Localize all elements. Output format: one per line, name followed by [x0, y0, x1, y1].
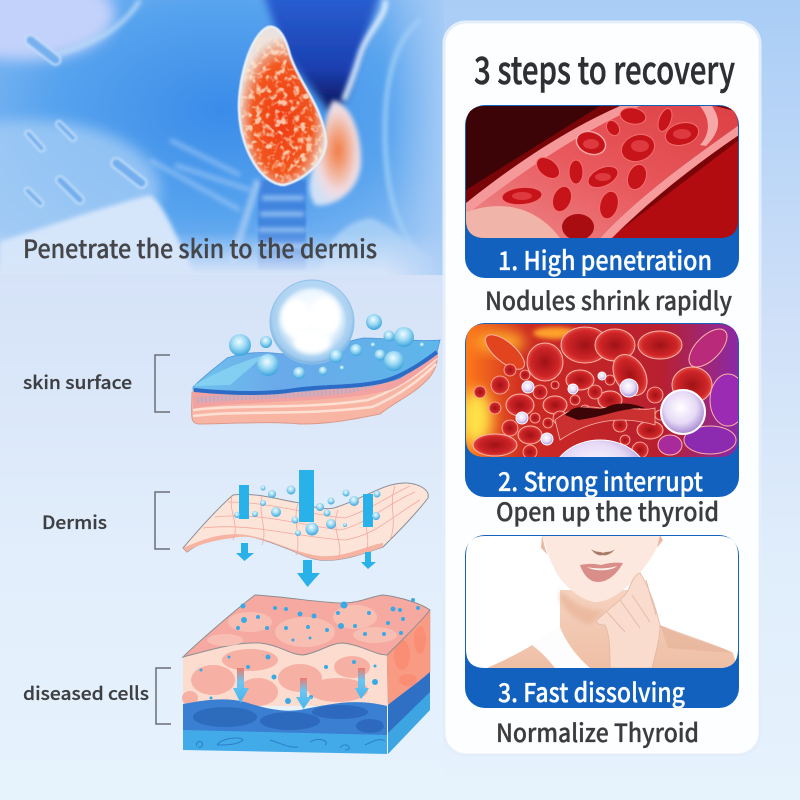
label: skin surface: skin surface	[23, 369, 132, 395]
step 3 caption: Normalize Thyroid	[496, 714, 699, 750]
block water droplets	[200, 598, 420, 704]
label: dermis: Dermis	[42, 509, 107, 535]
label: skin surface	[23, 355, 170, 412]
step 1 image: blood vessel	[465, 105, 739, 240]
big bubble	[270, 280, 354, 364]
step 2 caption: Open up the thyroid	[496, 493, 719, 529]
hand	[597, 573, 660, 668]
thyroid texture	[241, 29, 324, 183]
step 2 card	[465, 323, 739, 497]
thyroid back lobe	[309, 100, 361, 205]
lips	[580, 563, 623, 582]
arrows into dermis	[236, 470, 376, 587]
step 1 card	[465, 105, 739, 278]
heading: penetrate the skin: Penetrate the skin to the dermis	[23, 230, 377, 266]
step 1 caption: Nodules shrink rapidly	[485, 282, 732, 318]
step 3 image: woman touching neck	[465, 535, 739, 669]
step 2 image: blood cells	[466, 324, 738, 457]
label: diseased cells: diseased cells	[23, 680, 149, 706]
illustration: skin surface layers with bubbles	[192, 280, 440, 424]
label: diseased cells	[23, 668, 171, 724]
small bubbles	[229, 314, 424, 379]
step 2 label: 2. Strong interrupt	[498, 462, 703, 499]
panel: 3 steps to recovery	[444, 22, 760, 755]
step 3 label: 3. Fast dissolving	[498, 673, 685, 710]
step 1 label: 1. High penetration	[498, 241, 712, 278]
nose	[591, 549, 615, 555]
label: dermis	[42, 492, 170, 549]
thyroid main lobe	[239, 27, 326, 185]
step 3 card	[465, 535, 739, 710]
illustration: diseased cells block	[182, 595, 430, 754]
dermis bubbles	[234, 486, 380, 536]
neck pill marks	[23, 33, 149, 208]
illustration: dermis sheet with arrows	[183, 470, 428, 587]
photo: thyroid in the neck	[0, 0, 444, 275]
